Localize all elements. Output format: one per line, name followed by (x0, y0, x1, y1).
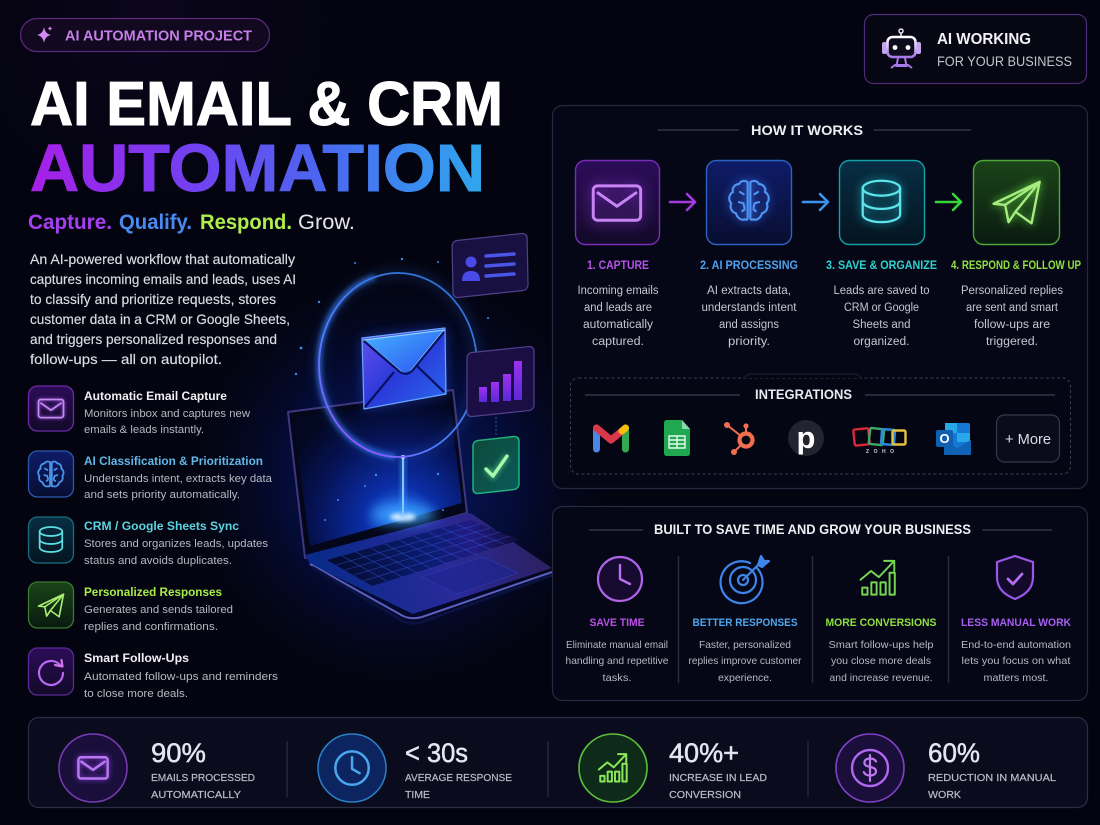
title: AUTOMATION (30, 131, 485, 206)
feature: automatic email capture: Monitors inbox and captures new (84, 408, 250, 420)
tagline: Grow. (298, 211, 355, 234)
stat: 90 percent: 90% (151, 738, 206, 768)
benefit: less manual work (961, 556, 1071, 684)
feature list (28, 386, 279, 700)
illustration: laptop with email hologram (288, 233, 552, 623)
step 1: capture: Incoming emails (578, 285, 659, 297)
arrow 1 (670, 194, 695, 210)
benefit: save time: handling and repetitive (566, 655, 669, 667)
benefit: more conversions: Smart follow-ups help (828, 639, 934, 651)
benefit: more conversions: and increase revenue. (830, 672, 932, 684)
icon: outlook: O (939, 431, 950, 446)
benefit: less manual work: lets you focus on what (962, 655, 1071, 667)
step 1: capture (576, 160, 660, 348)
button: more (996, 415, 1060, 462)
benefit: save time: SAVE TIME (590, 617, 644, 629)
icon: zoho: ZOHO (866, 449, 894, 455)
feature: CRM sheets sync (28, 517, 269, 567)
feature: AI classification (28, 451, 273, 501)
intro paragraph: to classify and prioritize requests, stores (30, 291, 276, 307)
benefit: better responses: Faster, personalized (699, 639, 791, 651)
icon: robot (882, 29, 921, 68)
feature: smart follow-ups: Smart Follow-Ups (84, 651, 189, 665)
title (30, 70, 503, 206)
step 1: capture: 1. CAPTURE (587, 260, 649, 272)
stat: under 30s: < 30s (405, 738, 468, 768)
feature: CRM sheets sync: Stores and organizes leads, updates (84, 538, 269, 550)
intro paragraph: An AI-powered workflow that automatically (30, 251, 295, 267)
benefit: less manual work: End-to-end automation (961, 639, 1071, 651)
icon: zoho (853, 428, 906, 455)
feature: CRM sheets sync: CRM / Google Sheets Sync (84, 519, 239, 533)
benefit: better responses: experience. (718, 672, 772, 684)
step 1: capture: and leads are (584, 302, 652, 314)
intro paragraph: follow-ups — all on autopilot. (30, 351, 222, 367)
feature: automatic email capture: Automatic Email Capture (84, 389, 227, 403)
icon: pipedrive: p (797, 420, 815, 455)
benefit: better responses: BETTER RESPONSES (692, 617, 798, 629)
card: contact (452, 233, 528, 298)
step 2: AI processing: AI extracts data, (707, 285, 791, 297)
step 3: save and organize: CRM or Google (844, 302, 919, 314)
benefit: more conversions (826, 561, 936, 684)
heading: how it works: HOW IT WORKS (751, 122, 863, 138)
stat: 40 percent plus: INCREASE IN LEAD (669, 772, 767, 784)
feature: smart follow-ups (28, 648, 279, 700)
feature: AI classification: AI Classification & Prioritization (84, 454, 263, 468)
arrow 3 (936, 194, 961, 210)
step 3: save and organize: organized. (854, 336, 910, 348)
step 2: AI processing (700, 160, 798, 348)
step 1: capture: automatically (583, 319, 653, 331)
feature: personalized responses: Generates and sends tailored (84, 604, 233, 616)
tagline: Qualify. (119, 211, 192, 234)
panel: how it works (552, 106, 1088, 488)
step 2: AI processing: priority. (728, 336, 770, 348)
feature: automatic email capture (28, 386, 250, 436)
feature: AI classification: and sets priority automatically. (84, 489, 240, 501)
step 4: respond and follow up (951, 160, 1081, 348)
benefit: save time: tasks. (602, 672, 632, 684)
feature: personalized responses (28, 582, 233, 633)
card: check (473, 417, 519, 494)
panel: key statistics (28, 718, 1088, 808)
step 1: capture: captured. (592, 336, 644, 348)
laptop (288, 390, 552, 623)
mail envelope (362, 328, 446, 409)
badge: AI automation project: AI AUTOMATION PROJECT (65, 28, 252, 44)
badge: AI working for your business: FOR YOUR BUSINESS (937, 53, 1072, 69)
stat: 40 percent plus: CONVERSION (669, 789, 741, 801)
integrations box (570, 374, 1070, 474)
stat: under 30s (318, 734, 512, 802)
feature: smart follow-ups: Automated follow-ups and reminders (84, 671, 279, 683)
icon: outlook (936, 423, 971, 455)
step 3: save and organize (826, 160, 937, 348)
step 3: save and organize: Leads are saved to (834, 285, 930, 297)
step 4: respond and follow up: are sent and smart (966, 302, 1059, 314)
arrow 2 (803, 194, 828, 210)
glowing ring (319, 273, 477, 457)
badge: AI automation project (20, 18, 270, 52)
step 4: respond and follow up: Personalized replies (961, 285, 1063, 297)
heading: built to save time: BUILT TO SAVE TIME AND GROW YOUR BUSINESS (654, 522, 971, 537)
stat: 60 percent: WORK (928, 789, 961, 801)
stat: 60 percent (836, 734, 1056, 802)
badge: AI working for your business: AI WORKING (937, 31, 1031, 48)
tagline (28, 211, 355, 234)
card: bar chart (467, 346, 534, 417)
stat: 90 percent: EMAILS PROCESSED (151, 772, 255, 784)
tagline: Respond. (200, 211, 292, 234)
benefit: more conversions: MORE CONVERSIONS (826, 617, 936, 629)
benefit: save time: Eliminate manual email (566, 639, 668, 651)
intro paragraph: customer data in a CRM or Google Sheets, (30, 311, 290, 327)
feature: CRM sheets sync: status and avoids duplicates. (84, 555, 232, 567)
title: AI EMAIL & CRM (30, 70, 503, 139)
step 4: respond and follow up: follow-ups are (974, 319, 1050, 331)
panel: built to save time (552, 506, 1088, 700)
particles (295, 258, 489, 521)
stat: 40 percent plus: 40%+ (669, 738, 739, 768)
feature: automatic email capture: emails & leads instantly. (84, 424, 204, 436)
feature: personalized responses: Personalized Responses (84, 585, 222, 599)
button: more: + More (1005, 431, 1051, 448)
icon: pipedrive (788, 420, 824, 456)
step 3: save and organize: 3. SAVE & ORGANIZE (826, 260, 937, 272)
step 2: AI processing: understands intent (702, 302, 797, 314)
icon: google sheets (664, 420, 690, 456)
integrations box: INTEGRATIONS (755, 387, 852, 402)
badge: AI working for your business (864, 14, 1086, 84)
stat: 40 percent plus (579, 734, 767, 802)
icon: gmail (596, 428, 626, 449)
step 4: respond and follow up: triggered. (986, 336, 1038, 348)
icon: hubspot (724, 422, 752, 455)
stat: under 30s: AVERAGE RESPONSE (405, 772, 512, 784)
benefit: less manual work: matters most. (984, 672, 1048, 684)
stat: 60 percent: 60% (928, 738, 980, 768)
step 2: AI processing: 2. AI PROCESSING (700, 260, 798, 272)
step 2: AI processing: and assigns (719, 319, 779, 331)
intro paragraph (30, 251, 296, 367)
step 3: save and organize: Sheets and (852, 319, 910, 331)
step 4: respond and follow up: 4. RESPOND & FOLLOW UP (951, 260, 1081, 272)
stat: 90 percent: AUTOMATICALLY (151, 789, 241, 801)
benefit: less manual work: LESS MANUAL WORK (961, 617, 1071, 629)
feature: AI classification: Understands intent, extracts key data (84, 473, 273, 485)
stat: 90 percent (59, 734, 255, 802)
feature: smart follow-ups: to close more deals. (84, 688, 188, 700)
stat: under 30s: TIME (405, 789, 430, 801)
benefit: better responses: replies improve customer (688, 655, 802, 667)
benefit: more conversions: you close more deals (831, 655, 931, 667)
benefit: better responses (688, 556, 802, 684)
feature: personalized responses: replies and confirmations. (84, 621, 218, 633)
intro paragraph: and triggers personalized responses and (30, 331, 277, 347)
benefit: save time (566, 557, 669, 684)
intro paragraph: captures incoming emails and leads, uses AI (30, 271, 296, 287)
tagline: Capture. (28, 211, 112, 234)
stat: 60 percent: REDUCTION IN MANUAL (928, 772, 1056, 784)
screen glow beam (371, 455, 435, 524)
